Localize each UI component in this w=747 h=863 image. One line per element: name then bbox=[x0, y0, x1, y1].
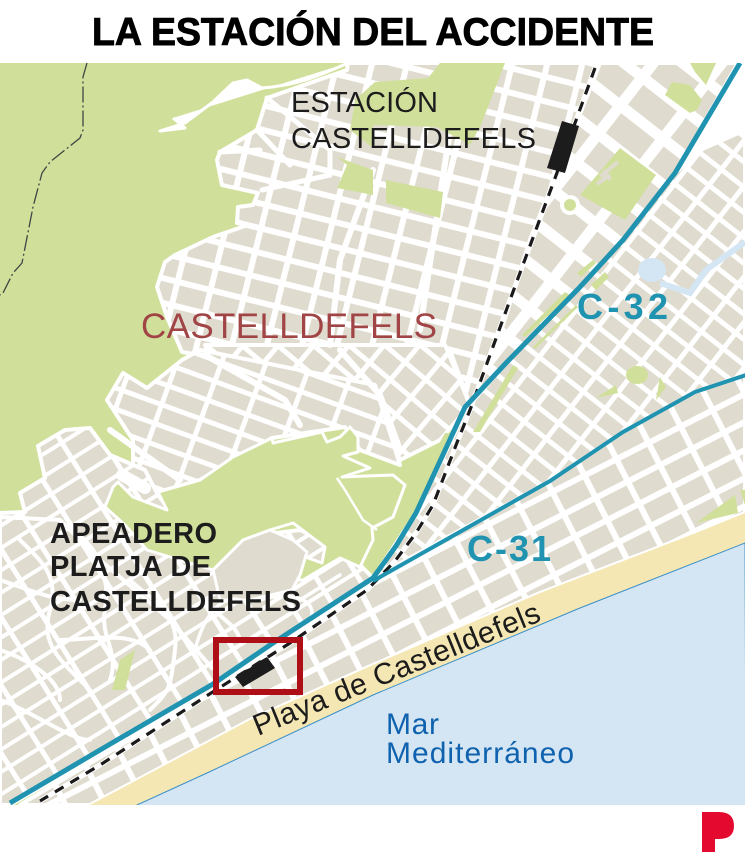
top right parks bbox=[690, 63, 716, 85]
south-west district bbox=[0, 428, 373, 805]
label: sea: Mediterráneo bbox=[386, 737, 574, 770]
label: halt: PLATJA DE bbox=[50, 551, 211, 583]
label: town: CASTELLDEFELS bbox=[141, 307, 437, 346]
Platja de Castelldefels halt bbox=[235, 657, 275, 687]
beige hill quarter bbox=[213, 530, 307, 600]
park near Castelldefels station label bbox=[350, 63, 505, 148]
small square bbox=[337, 157, 373, 195]
sea bbox=[137, 543, 746, 806]
sports park buildings bbox=[597, 162, 618, 184]
label: C-32: C-32 bbox=[577, 286, 668, 327]
label: station: ESTACIÓN bbox=[291, 86, 438, 119]
north-east corner background bbox=[684, 63, 745, 162]
forest background bbox=[0, 63, 452, 805]
parks bbox=[112, 63, 745, 690]
sports park bbox=[580, 148, 656, 220]
highlight box bbox=[216, 640, 300, 692]
label: station: CASTELLDEFELS bbox=[291, 123, 536, 155]
hill track bbox=[160, 63, 348, 131]
winding roads bbox=[0, 98, 450, 740]
lake and stream bbox=[638, 242, 745, 293]
municipal boundary bbox=[0, 63, 87, 295]
label: halt: CASTELLDEFELS bbox=[50, 586, 301, 618]
coastal district bbox=[20, 375, 745, 805]
Castelldefels station bbox=[547, 121, 579, 173]
label: sea: Mar bbox=[386, 708, 439, 741]
logo bbox=[702, 812, 734, 852]
town park bbox=[386, 180, 443, 218]
roundabout bbox=[560, 195, 580, 215]
road C-31 bbox=[373, 375, 746, 581]
east of C-32 bbox=[373, 130, 745, 578]
eastern small parks bbox=[626, 366, 648, 384]
label: C-31: C-31 bbox=[467, 528, 551, 569]
hill inner track bbox=[337, 478, 377, 530]
title: LA ESTACIÓN DEL ACCIDENTE bbox=[92, 10, 654, 54]
railway line bbox=[40, 68, 595, 801]
central green hill bbox=[105, 427, 405, 580]
hillside diagonal grid bbox=[205, 345, 470, 460]
hillside terraces bbox=[107, 350, 400, 492]
boulevard strips bbox=[522, 292, 570, 337]
west of C-32 north bbox=[470, 63, 738, 405]
town centre bbox=[157, 63, 600, 405]
label: beach: Playa de Castelldefels bbox=[248, 596, 545, 742]
beach bbox=[90, 513, 745, 805]
label: halt: APEADERO bbox=[50, 518, 217, 550]
